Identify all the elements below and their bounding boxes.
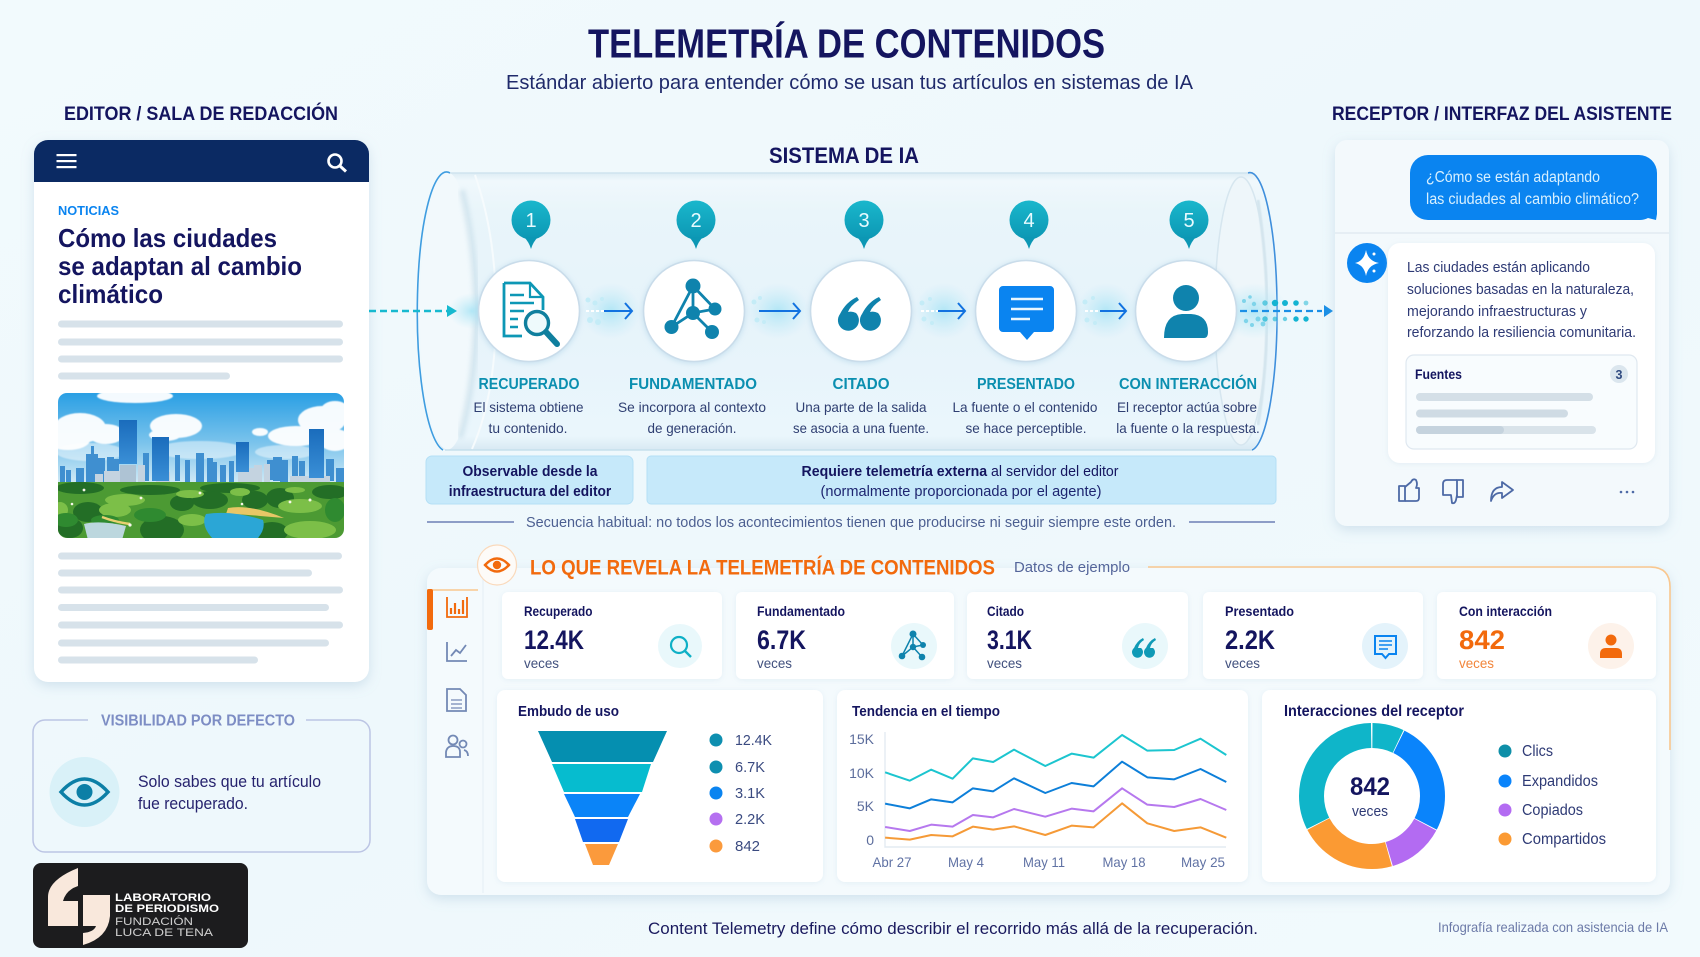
y axis labels: 0 [866, 832, 874, 848]
icon: network [664, 278, 722, 339]
chart: receptor interactions [1262, 690, 1656, 882]
donut legend: Compartidos [1522, 831, 1606, 848]
donut [1312, 736, 1432, 856]
heading: sistema de IA: SISTEMA DE IA [769, 143, 919, 168]
y axis labels [849, 731, 875, 848]
sources box: 3 [1616, 368, 1623, 382]
icon: more [1620, 491, 1634, 493]
step 2: fundamentado [618, 200, 766, 436]
pin 3 [844, 200, 884, 249]
icon: person [1164, 285, 1208, 338]
user question bubble [1410, 155, 1657, 220]
logo: Laboratorio de Periodismo: LABORATORIO [115, 892, 212, 904]
pin 5: 5 [1183, 210, 1195, 232]
KPI card: con interacción: 842 [1459, 625, 1505, 655]
x axis labels: May 11 [1023, 854, 1065, 870]
KPI card: con interacción: veces [1459, 655, 1494, 671]
sidebar tab indicator [427, 589, 433, 630]
flow particles [448, 283, 1309, 339]
sources box: Fuentes [1415, 366, 1462, 382]
trend lines [885, 735, 1226, 840]
arrow: step 4 to 5 [1085, 303, 1126, 319]
icon: document with magnifier [504, 283, 557, 344]
description 5: la fuente o la respuesta. [1116, 420, 1260, 436]
step 3: citado [793, 200, 929, 436]
arrow: step 2 to 3 [759, 303, 800, 319]
description 2: Se incorpora al contexto [618, 399, 766, 415]
description 3: se asocia a una fuente. [793, 420, 929, 436]
logo: Laboratorio de Periodismo: LUCA DE TENA [115, 927, 214, 939]
x axis labels [872, 854, 1225, 870]
logo: Laboratorio de Periodismo: FUNDACIÓN [115, 915, 193, 928]
label 5: CON INTERACCIÓN [1119, 374, 1257, 393]
answer text: Las ciudades están aplicando [1407, 259, 1590, 276]
chart: trend over time [837, 690, 1248, 882]
arrow: editor to AI system [369, 305, 457, 317]
answer text: reforzando la resiliencia comunitaria. [1407, 324, 1636, 341]
description 4: se hace perceptible. [966, 420, 1086, 436]
dashboard heading: LO QUE REVELA LA TELEMETRÍA DE CONTENIDOS [530, 556, 995, 580]
KPI card: recuperado: veces [524, 655, 559, 671]
pin 5 [1170, 200, 1208, 249]
pin 1 [512, 200, 550, 249]
KPI card: fundamentado [736, 592, 954, 679]
icon: document [447, 689, 466, 711]
article headline: se adaptan al cambio [58, 251, 302, 281]
icon: eye badge [478, 545, 516, 585]
article headline: Cómo las ciudades [58, 223, 277, 253]
KPI card: fundamentado: Fundamentado [757, 604, 845, 619]
icon: thumbs up [1399, 479, 1419, 501]
description 4 [952, 399, 1098, 436]
description 3: Una parte de la salida [796, 399, 927, 415]
funnel shape [538, 731, 667, 865]
icon: quotes [838, 297, 881, 331]
KPI card: presentado [1203, 592, 1423, 679]
funnel legend [710, 732, 772, 855]
KPI card: citado: 3.1K [987, 625, 1032, 655]
chart: receptor interactions: Interacciones del receptor [1284, 703, 1464, 720]
panel: telemetry dashboard [427, 545, 1670, 895]
credit: Infografía realizada con asistencia de IA [1438, 919, 1669, 935]
description 4: La fuente o el contenido [952, 399, 1098, 415]
KPI card: citado: Citado [987, 604, 1024, 619]
description 1: tu contenido. [488, 420, 568, 436]
description 3 [793, 399, 929, 436]
article header bar [34, 140, 369, 182]
pin 2: 2 [690, 210, 702, 232]
footer statement: Content Telemetry define cómo describir el recorrido más allá de la recuperación. [648, 919, 1258, 938]
logo: Laboratorio de Periodismo [33, 863, 248, 948]
icon: menu [56, 154, 76, 168]
funnel legend: 6.7K [735, 759, 765, 776]
x axis labels: Abr 27 [872, 854, 912, 870]
sample data note: Datos de ejemplo [1014, 559, 1130, 576]
chart: trend over time: Tendencia en el tiempo [852, 703, 1000, 720]
KPI card: presentado: 2.2K [1225, 625, 1275, 655]
step 5: con interacción [1116, 200, 1260, 436]
x axis labels: May 4 [948, 854, 984, 870]
user question bubble: ¿Cómo se están adaptando [1426, 169, 1600, 186]
x axis labels: May 25 [1181, 854, 1225, 870]
heading: receptor: RECEPTOR / INTERFAZ DEL ASISTENTE [1332, 103, 1672, 125]
description 1: El sistema obtiene [474, 399, 584, 415]
panel: AI system tube [417, 172, 1277, 450]
answer text: soluciones basadas en la naturaleza, [1407, 281, 1634, 298]
KPI card: presentado: veces [1225, 655, 1260, 671]
pin 3: 3 [858, 210, 870, 232]
KPI card: citado: veces [987, 655, 1022, 671]
donut legend [1498, 743, 1606, 848]
article headline [58, 223, 302, 309]
donut centre value: veces [1352, 804, 1388, 820]
answer text: mejorando infraestructuras y [1407, 303, 1587, 320]
funnel legend: 842 [735, 838, 760, 855]
subtitle: Estándar abierto para entender cómo se usan tus artículos en sistemas de IA [506, 71, 1193, 94]
KPI card: fundamentado: 6.7K [757, 625, 806, 655]
icon: search [328, 154, 346, 172]
icon: chat bubble [999, 286, 1054, 340]
icon: users [446, 736, 468, 757]
pin 2 [676, 200, 716, 249]
article image: city skyline [58, 393, 344, 538]
icon: thumbs down [1443, 480, 1463, 503]
pin 4 [1010, 200, 1048, 249]
heading: editor: EDITOR / SALA DE REDACCIÓN [64, 101, 338, 125]
icon: person [1588, 623, 1634, 669]
label 2: FUNDAMENTADO [629, 376, 757, 393]
chart: usage funnel [497, 690, 823, 882]
description 2: de generación. [648, 420, 736, 436]
funnel legend: 2.2K [735, 811, 765, 828]
visibility text: fue recuperado. [138, 794, 248, 813]
label 4: PRESENTADO [977, 376, 1075, 393]
arrow: step 1 to 2 [586, 303, 632, 319]
logo: Laboratorio de Periodismo: DE PERIODISMO [115, 903, 220, 915]
callout: observable from editor: infraestructura del editor [449, 484, 612, 500]
description 1 [474, 399, 584, 436]
donut centre value [1350, 773, 1390, 820]
label 1: RECUPERADO [478, 376, 580, 393]
panel: article card [34, 140, 369, 682]
donut legend: Expandidos [1522, 773, 1598, 790]
panel: assistant interface [1335, 140, 1669, 526]
icon: assistant avatar [1347, 243, 1387, 283]
donut legend: Clics [1522, 743, 1553, 760]
donut legend: Copiados [1522, 802, 1583, 819]
KPI card: con interacción: Con interacción [1459, 604, 1552, 619]
title: TELEMETRÍA DE CONTENIDOS [588, 20, 1105, 66]
description 2 [618, 399, 766, 436]
callout: requires external telemetry: (normalmente proporcionada por el agente) [820, 484, 1102, 500]
label 3: CITADO [832, 376, 890, 393]
placeholder text lines [58, 320, 343, 380]
callout: requires external telemetry: Requiere telemetría externa al servidor del editor [802, 464, 1119, 480]
KPI card: citado [967, 592, 1188, 679]
visibility text [138, 772, 321, 813]
user question bubble: las ciudades al cambio climático? [1426, 191, 1639, 208]
icon: eye [50, 757, 120, 827]
visibility heading: VISIBILIDAD POR DEFECTO [101, 712, 295, 730]
funnel legend: 12.4K [735, 732, 772, 749]
chart: usage funnel: Embudo de uso [518, 703, 619, 720]
icon: search [658, 624, 702, 668]
callout: requires external telemetry [647, 456, 1276, 504]
KPI card: presentado: Presentado [1225, 604, 1294, 619]
step 4: presentado [952, 200, 1098, 436]
x axis labels: May 18 [1102, 854, 1146, 870]
answer card [1388, 243, 1655, 463]
donut centre value: 842 [1350, 773, 1390, 801]
KPI card: recuperado: Recuperado [524, 604, 592, 619]
pin 1: 1 [525, 210, 537, 232]
y axis labels: 15K [849, 731, 875, 747]
icon: quotes [1122, 623, 1168, 669]
pin 4: 4 [1023, 210, 1035, 232]
description 5: El receptor actúa sobre [1117, 399, 1257, 415]
placeholder text lines [58, 552, 343, 664]
answer text [1407, 259, 1636, 341]
KPI card: recuperado: 12.4K [524, 625, 584, 655]
arrow: step 3 to 4 [921, 303, 965, 319]
icon: bar chart [447, 597, 467, 617]
KPI card: fundamentado: veces [757, 655, 792, 671]
funnel legend: 3.1K [735, 785, 765, 802]
icon: chat [1362, 623, 1408, 669]
arrow: AI system to receptor [1240, 305, 1333, 317]
description 5 [1116, 399, 1260, 436]
panel: default visibility [33, 712, 370, 852]
KPI card: con interacción [1437, 592, 1656, 679]
callout: observable from editor: Observable desde la [462, 464, 598, 480]
step 1: recuperado [474, 200, 584, 436]
sequence note: Secuencia habitual: no todos los acontecimientos tienen que producirse ni seguir siempre este orden. [526, 514, 1176, 531]
sources box [1406, 355, 1637, 449]
visibility text: Solo sabes que tu artículo [138, 772, 321, 791]
KPI card: recuperado [502, 592, 722, 679]
icon: share [1491, 482, 1513, 501]
callout: observable from editor [426, 456, 633, 504]
icon: line chart [447, 642, 467, 661]
category label: NOTICIAS [58, 203, 119, 218]
article headline: climático [58, 279, 163, 309]
y axis labels: 5K [857, 798, 875, 814]
icon: network [891, 623, 937, 669]
y axis labels: 10K [849, 765, 875, 781]
